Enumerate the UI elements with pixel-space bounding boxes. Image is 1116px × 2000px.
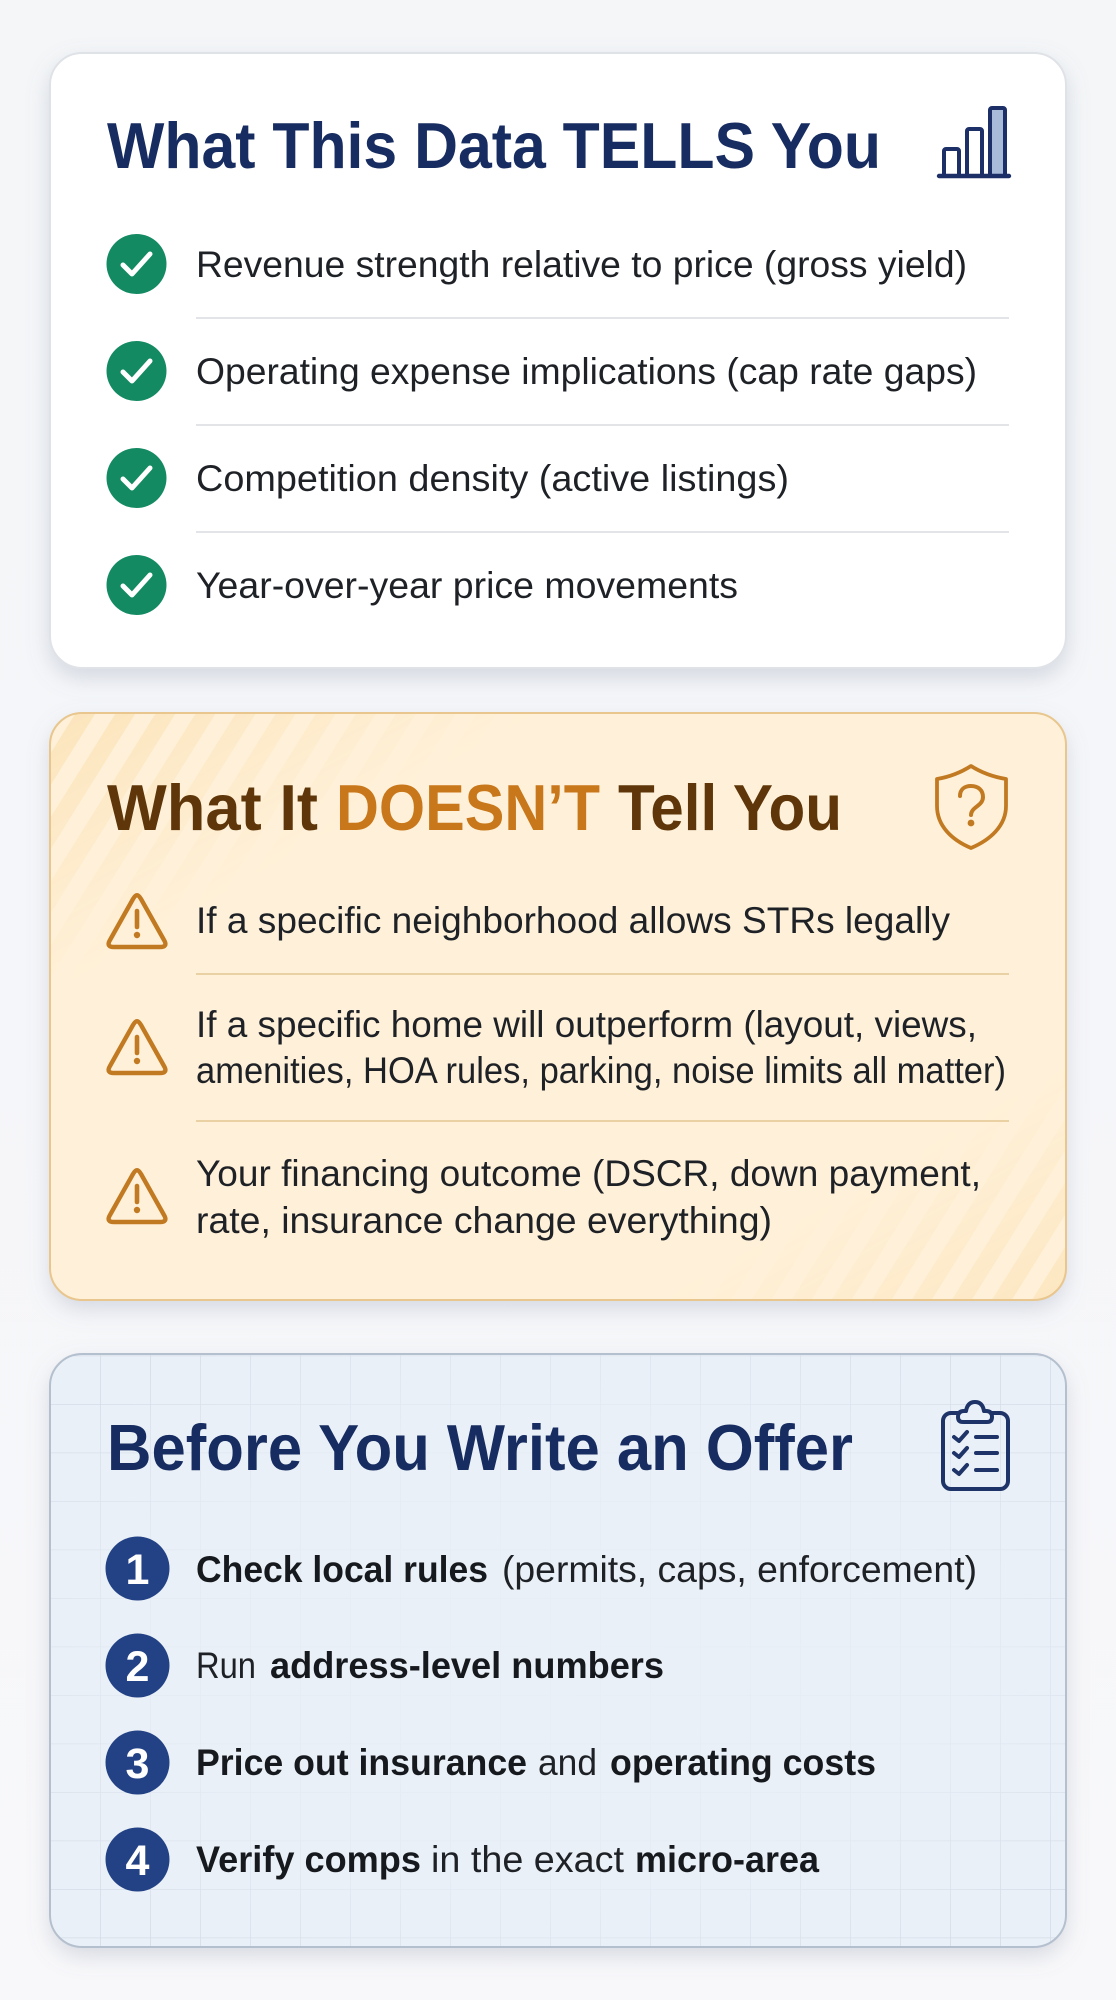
icon: clipboard checklist [943,1402,1008,1489]
item: specific home: amenities, HOA rules, parking, noise limits all matter) [196,1050,1006,1091]
item: competition density: Competition density (active listings) [196,458,789,499]
step 4 [106,1828,819,1892]
step 4: micro-area [635,1839,819,1880]
item: specific home: If a specific home will outperform (layout, views, [196,1004,977,1045]
step 3: and [538,1742,597,1783]
step 2: Run [196,1645,256,1686]
item: financing outcome [109,1153,981,1241]
item: year-over-year: Year-over-year price movements [196,565,738,606]
step 1: Check local rules [196,1549,488,1590]
panel: what this data tells you [50,53,1066,668]
step 2 [106,1634,664,1698]
step 3 [106,1730,876,1794]
step 3: operating costs [610,1742,876,1783]
step 3: 3 [126,1740,149,1788]
panel: what it doesn't tell you [50,713,1066,1300]
item: operating expense: Operating expense implications (cap rate gaps) [196,351,977,392]
step 4: 4 [126,1837,150,1885]
step 4: Verify comps [196,1839,421,1880]
item: competition density [106,448,789,508]
icon: bar chart [939,108,1009,176]
heading: What This Data TELLS You [107,109,881,182]
item: revenue strength [106,234,967,294]
heading: DOESN’T [336,771,600,844]
step 2: 2 [126,1643,149,1691]
step 1: 1 [126,1546,149,1594]
heading [107,771,842,844]
icon: shield with question mark [937,766,1006,848]
item: financing outcome: rate, insurance change everything) [196,1200,772,1241]
item: operating expense [106,341,977,401]
step 3: Price out insurance [196,1742,527,1783]
heading: What It [107,771,318,844]
step 1 [106,1536,977,1600]
step 4: in the exact [431,1839,625,1880]
step 2: address-level numbers [270,1645,664,1686]
panel: before you write an offer [50,1354,1066,1947]
heading: Before You Write an Offer [107,1411,853,1484]
item: neighborhood legality: If a specific neighborhood allows STRs legally [196,900,951,941]
step 1: (permits, caps, enforcement) [502,1549,977,1590]
heading: Tell You [618,771,842,844]
item: financing outcome: Your financing outcome (DSCR, down payment, [196,1153,981,1194]
item: specific home [109,1004,1006,1091]
item: revenue strength: Revenue strength relative to price (gross yield) [196,244,967,285]
item: year-over-year [106,555,738,615]
